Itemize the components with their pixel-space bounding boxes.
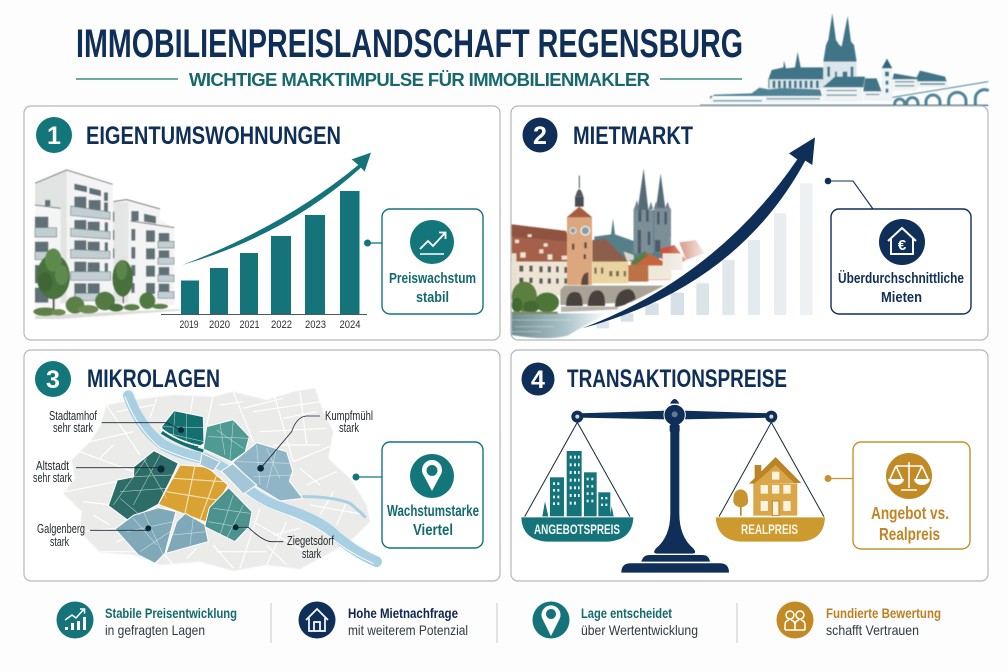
item: Fundierte Bewertung: schafft Vertrauen	[826, 622, 919, 638]
districts	[108, 411, 303, 563]
item: Lage entscheidet: über Wertentwicklung	[581, 622, 698, 638]
badge 4: 4	[531, 366, 545, 394]
item: Fundierte Bewertung: Fundierte Bewertung	[826, 605, 941, 621]
badge 3	[35, 361, 71, 397]
Stadtamhof channel	[160, 428, 203, 451]
callout: Preiswachstum stabil: stabil	[416, 289, 449, 306]
icon: scales	[886, 453, 932, 499]
item: Hohe Mietnachfrage: mit weiterem Potenzial	[348, 622, 468, 638]
chart: price growth bars: 2020	[209, 319, 230, 331]
illustration: balance scale	[521, 399, 825, 573]
badge 2: 2	[533, 122, 547, 150]
leader lines	[76, 416, 320, 542]
illustration: apartment buildings	[33, 170, 180, 319]
illustration: Regensburg old town	[512, 168, 711, 338]
callout: Wachstumstarke Viertel	[352, 442, 483, 548]
chart: price growth bars	[161, 191, 367, 331]
heading: EIGENTUMSWOHNUNGEN	[86, 122, 341, 150]
callout: Angebot vs. Realpreis	[824, 442, 970, 549]
map labels: Kumpfmühl	[325, 409, 373, 423]
chart: faded rent bars	[596, 183, 813, 328]
map labels: sehr stark	[33, 471, 73, 485]
pan label: Realpreis: REALPREIS	[741, 521, 798, 537]
pan label: Angebotspreis: ANGEBOTSPREIS	[534, 521, 620, 537]
badge 2	[522, 118, 558, 152]
map labels: Galgenberg	[37, 522, 85, 536]
panel: Eigentumswohnungen	[24, 106, 500, 340]
chart: price growth bars: 2021	[240, 319, 260, 331]
title: IMMOBILIENPREISLANDSCHAFT REGENSBURG	[76, 22, 743, 66]
base map	[63, 388, 370, 571]
item: Fundierte Bewertung	[776, 602, 941, 638]
left pan with buildings	[521, 451, 633, 542]
icon: location pin	[410, 454, 454, 498]
callout: Überdurchschnittliche Mieten: Mieten	[881, 289, 922, 306]
icon: rising chart	[410, 220, 454, 264]
map labels: stark	[50, 535, 70, 549]
icon: house with euro: €	[898, 237, 907, 254]
badge 1: 1	[47, 122, 61, 150]
summary strip	[56, 602, 941, 643]
heading: MIETMARKT	[573, 122, 693, 150]
item: Stabile Preisentwicklung: in gefragten Lagen	[105, 622, 205, 638]
item: Stabile Preisentwicklung	[56, 602, 237, 638]
map labels: sehr stark	[53, 421, 94, 435]
chart: price growth bars: 2023	[305, 319, 326, 331]
right pan with house	[716, 457, 825, 542]
map labels: Altstadt	[36, 459, 69, 473]
callout: Überdurchschnittliche Mieten	[825, 178, 971, 314]
water	[512, 313, 608, 338]
arrow: growth trend	[182, 153, 371, 265]
trees and shrubs	[33, 248, 168, 316]
item: Stabile Preisentwicklung: Stabile Preisentwicklung	[105, 605, 237, 621]
callout: Preiswachstum stabil	[364, 209, 483, 314]
badge 4	[522, 362, 554, 396]
subtitle: WICHTIGE MARKTIMPULSE FÜR IMMOBILIENMAKLER	[189, 69, 650, 90]
icon: house with euro	[879, 219, 925, 265]
panel: Mikrolagen	[24, 350, 500, 581]
district streets	[113, 412, 293, 555]
map: Regensburg districts	[33, 388, 377, 571]
item: Hohe Mietnachfrage: Hohe Mietnachfrage	[348, 605, 458, 621]
map labels: Ziegetsdorf	[287, 534, 334, 548]
badge 3: 3	[46, 366, 60, 394]
map labels	[33, 409, 373, 561]
panel: Mietmarkt	[511, 106, 988, 340]
badge 1	[36, 117, 72, 153]
map labels: stark	[302, 547, 322, 561]
illustration: Regensburg skyline	[700, 13, 989, 106]
callout: Angebot vs. Realpreis: Realpreis	[879, 524, 940, 544]
callout: Wachstumstarke Viertel: Viertel	[413, 522, 453, 539]
callout: Preiswachstum stabil: Preiswachstum	[389, 270, 476, 287]
item: Lage entscheidet: Lage entscheidet	[581, 605, 672, 621]
chart: price growth bars: 2019	[180, 319, 198, 331]
heading: TRANSAKTIONSPREISE	[567, 365, 787, 393]
heading: MIKROLAGEN	[87, 365, 220, 393]
callout: Angebot vs. Realpreis: Angebot vs.	[871, 503, 949, 523]
arrow: rent growth	[582, 137, 815, 328]
map labels: Stadtamhof	[49, 409, 97, 423]
river Danube	[125, 396, 377, 563]
item: Lage entscheidet	[532, 602, 698, 638]
callout: Wachstumstarke Viertel: Wachstumstarke	[387, 503, 479, 520]
chart: price growth bars: 2024	[340, 319, 360, 331]
panel: Transaktionspreise	[511, 350, 988, 581]
callout: Überdurchschnittliche Mieten: Überdurchschnittliche	[838, 270, 964, 287]
scale frame	[525, 399, 824, 573]
item: Hohe Mietnachfrage	[298, 602, 468, 638]
map labels: stark	[339, 421, 360, 435]
chart: price growth bars: 2022	[271, 319, 292, 331]
